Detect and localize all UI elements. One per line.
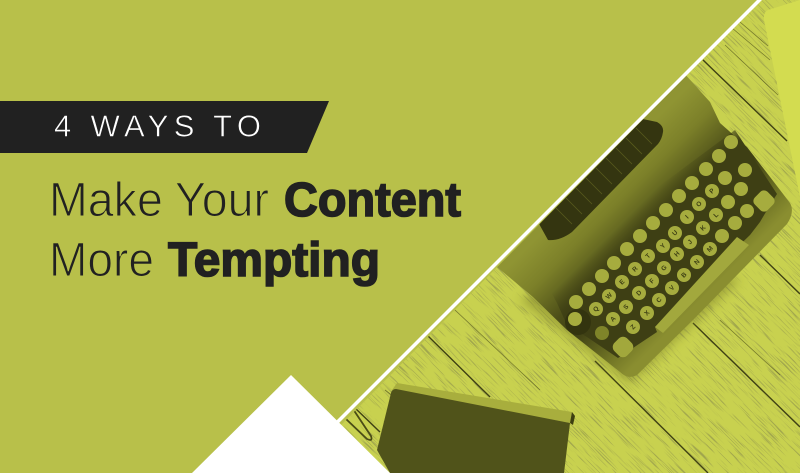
roller opening	[538, 118, 663, 240]
book cover	[377, 389, 570, 473]
book pages edge	[392, 383, 573, 423]
key legends: C	[655, 296, 664, 304]
title line 1 light: Make Your: Make Your	[49, 174, 269, 227]
duotone photo: typewriter on wooden desk	[341, 0, 800, 473]
QWERTY key row	[589, 171, 732, 316]
key legends: Y	[659, 242, 668, 250]
keyboard well	[550, 130, 777, 358]
key legends: I	[684, 214, 691, 220]
ZXCV key row	[626, 204, 754, 334]
key legends: B	[680, 271, 689, 279]
typewriter shadow	[520, 276, 740, 386]
title line 2 bold: Tempting: Tempting	[168, 234, 380, 287]
key legends: A	[609, 315, 618, 323]
ribbon text: 4 WAYS TO: 4 WAYS TO	[54, 108, 261, 144]
key legends	[592, 187, 720, 331]
book spine nub	[570, 412, 575, 425]
key legends: S	[622, 303, 631, 311]
shift and modifier keys	[568, 188, 777, 360]
key legends: V	[668, 284, 677, 292]
shift key recess	[565, 309, 591, 335]
book	[377, 383, 575, 473]
key legends: L	[712, 211, 720, 219]
key legends: E	[618, 278, 627, 286]
key legends: N	[693, 258, 702, 266]
white triangle at bottom	[192, 375, 390, 473]
key legends: J	[687, 238, 694, 246]
key legends: P	[708, 187, 717, 195]
key legends: T	[644, 252, 652, 260]
key legends: Z	[629, 323, 637, 331]
typewriter	[497, 72, 792, 384]
key legends: K	[699, 224, 708, 232]
key legends: R	[631, 265, 640, 273]
key legends: F	[648, 277, 656, 285]
black ribbon banner	[0, 101, 329, 153]
title	[49, 174, 461, 287]
paper clip	[346, 409, 372, 440]
ASDF key row	[606, 163, 752, 326]
title line 2 light: More: More	[49, 234, 154, 287]
space bar	[655, 237, 749, 333]
key legends: D	[635, 289, 644, 297]
white diagonal divider line	[336, 0, 762, 423]
key legends: X	[643, 309, 652, 317]
key legends: O	[695, 200, 704, 209]
typewriter body	[497, 72, 792, 377]
key legends: G	[660, 264, 669, 273]
title line 1 bold: Content: Content	[284, 174, 461, 227]
key legends: H	[673, 250, 682, 258]
notepad paper	[764, 0, 800, 197]
number key row	[569, 135, 738, 309]
key legends: W	[605, 291, 615, 301]
key legends: Q	[592, 305, 601, 314]
key legends: M	[706, 245, 715, 254]
key legends: U	[671, 229, 680, 237]
wooden desk surface	[341, 0, 800, 473]
